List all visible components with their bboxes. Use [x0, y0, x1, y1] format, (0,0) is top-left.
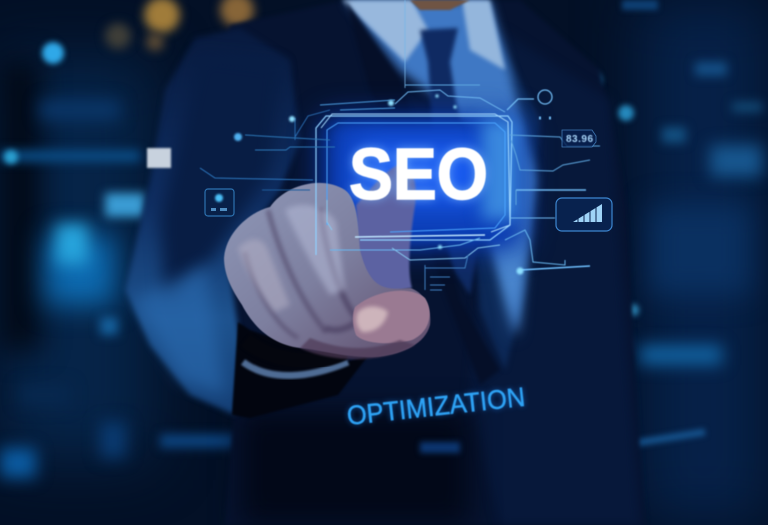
icon: rising bar chart	[556, 198, 612, 231]
blurred lower lapel text	[420, 442, 460, 453]
HUD circuit frame	[200, 0, 600, 290]
SEO glow: SEO	[349, 135, 488, 215]
suit: sleeve	[125, 28, 300, 415]
HUD nodes	[234, 94, 524, 275]
fist	[224, 183, 430, 357]
icon: ring node, upper right	[507, 90, 552, 118]
icon: node tile, left	[205, 189, 234, 216]
title: SEO: SEO	[349, 135, 488, 215]
fist highlights	[285, 205, 345, 295]
label chip: value readout: 83.96	[566, 134, 593, 145]
pointing hand	[224, 165, 430, 359]
index finger behind the SEO text	[356, 165, 416, 300]
caption: OPTIMIZATION: OPTIMIZATION	[345, 382, 527, 431]
background glow behind SEO panel	[320, 115, 525, 250]
shirt cuff and watch strap	[232, 322, 368, 418]
thumb tip	[353, 291, 430, 343]
suit: jacket torso	[150, 0, 645, 525]
caption glow: OPTIMIZATION	[345, 382, 527, 431]
finger shadows	[268, 210, 326, 332]
shirt and tie	[342, 0, 535, 385]
small white card on left sleeve	[147, 148, 171, 168]
label chip: value readout	[562, 130, 596, 147]
